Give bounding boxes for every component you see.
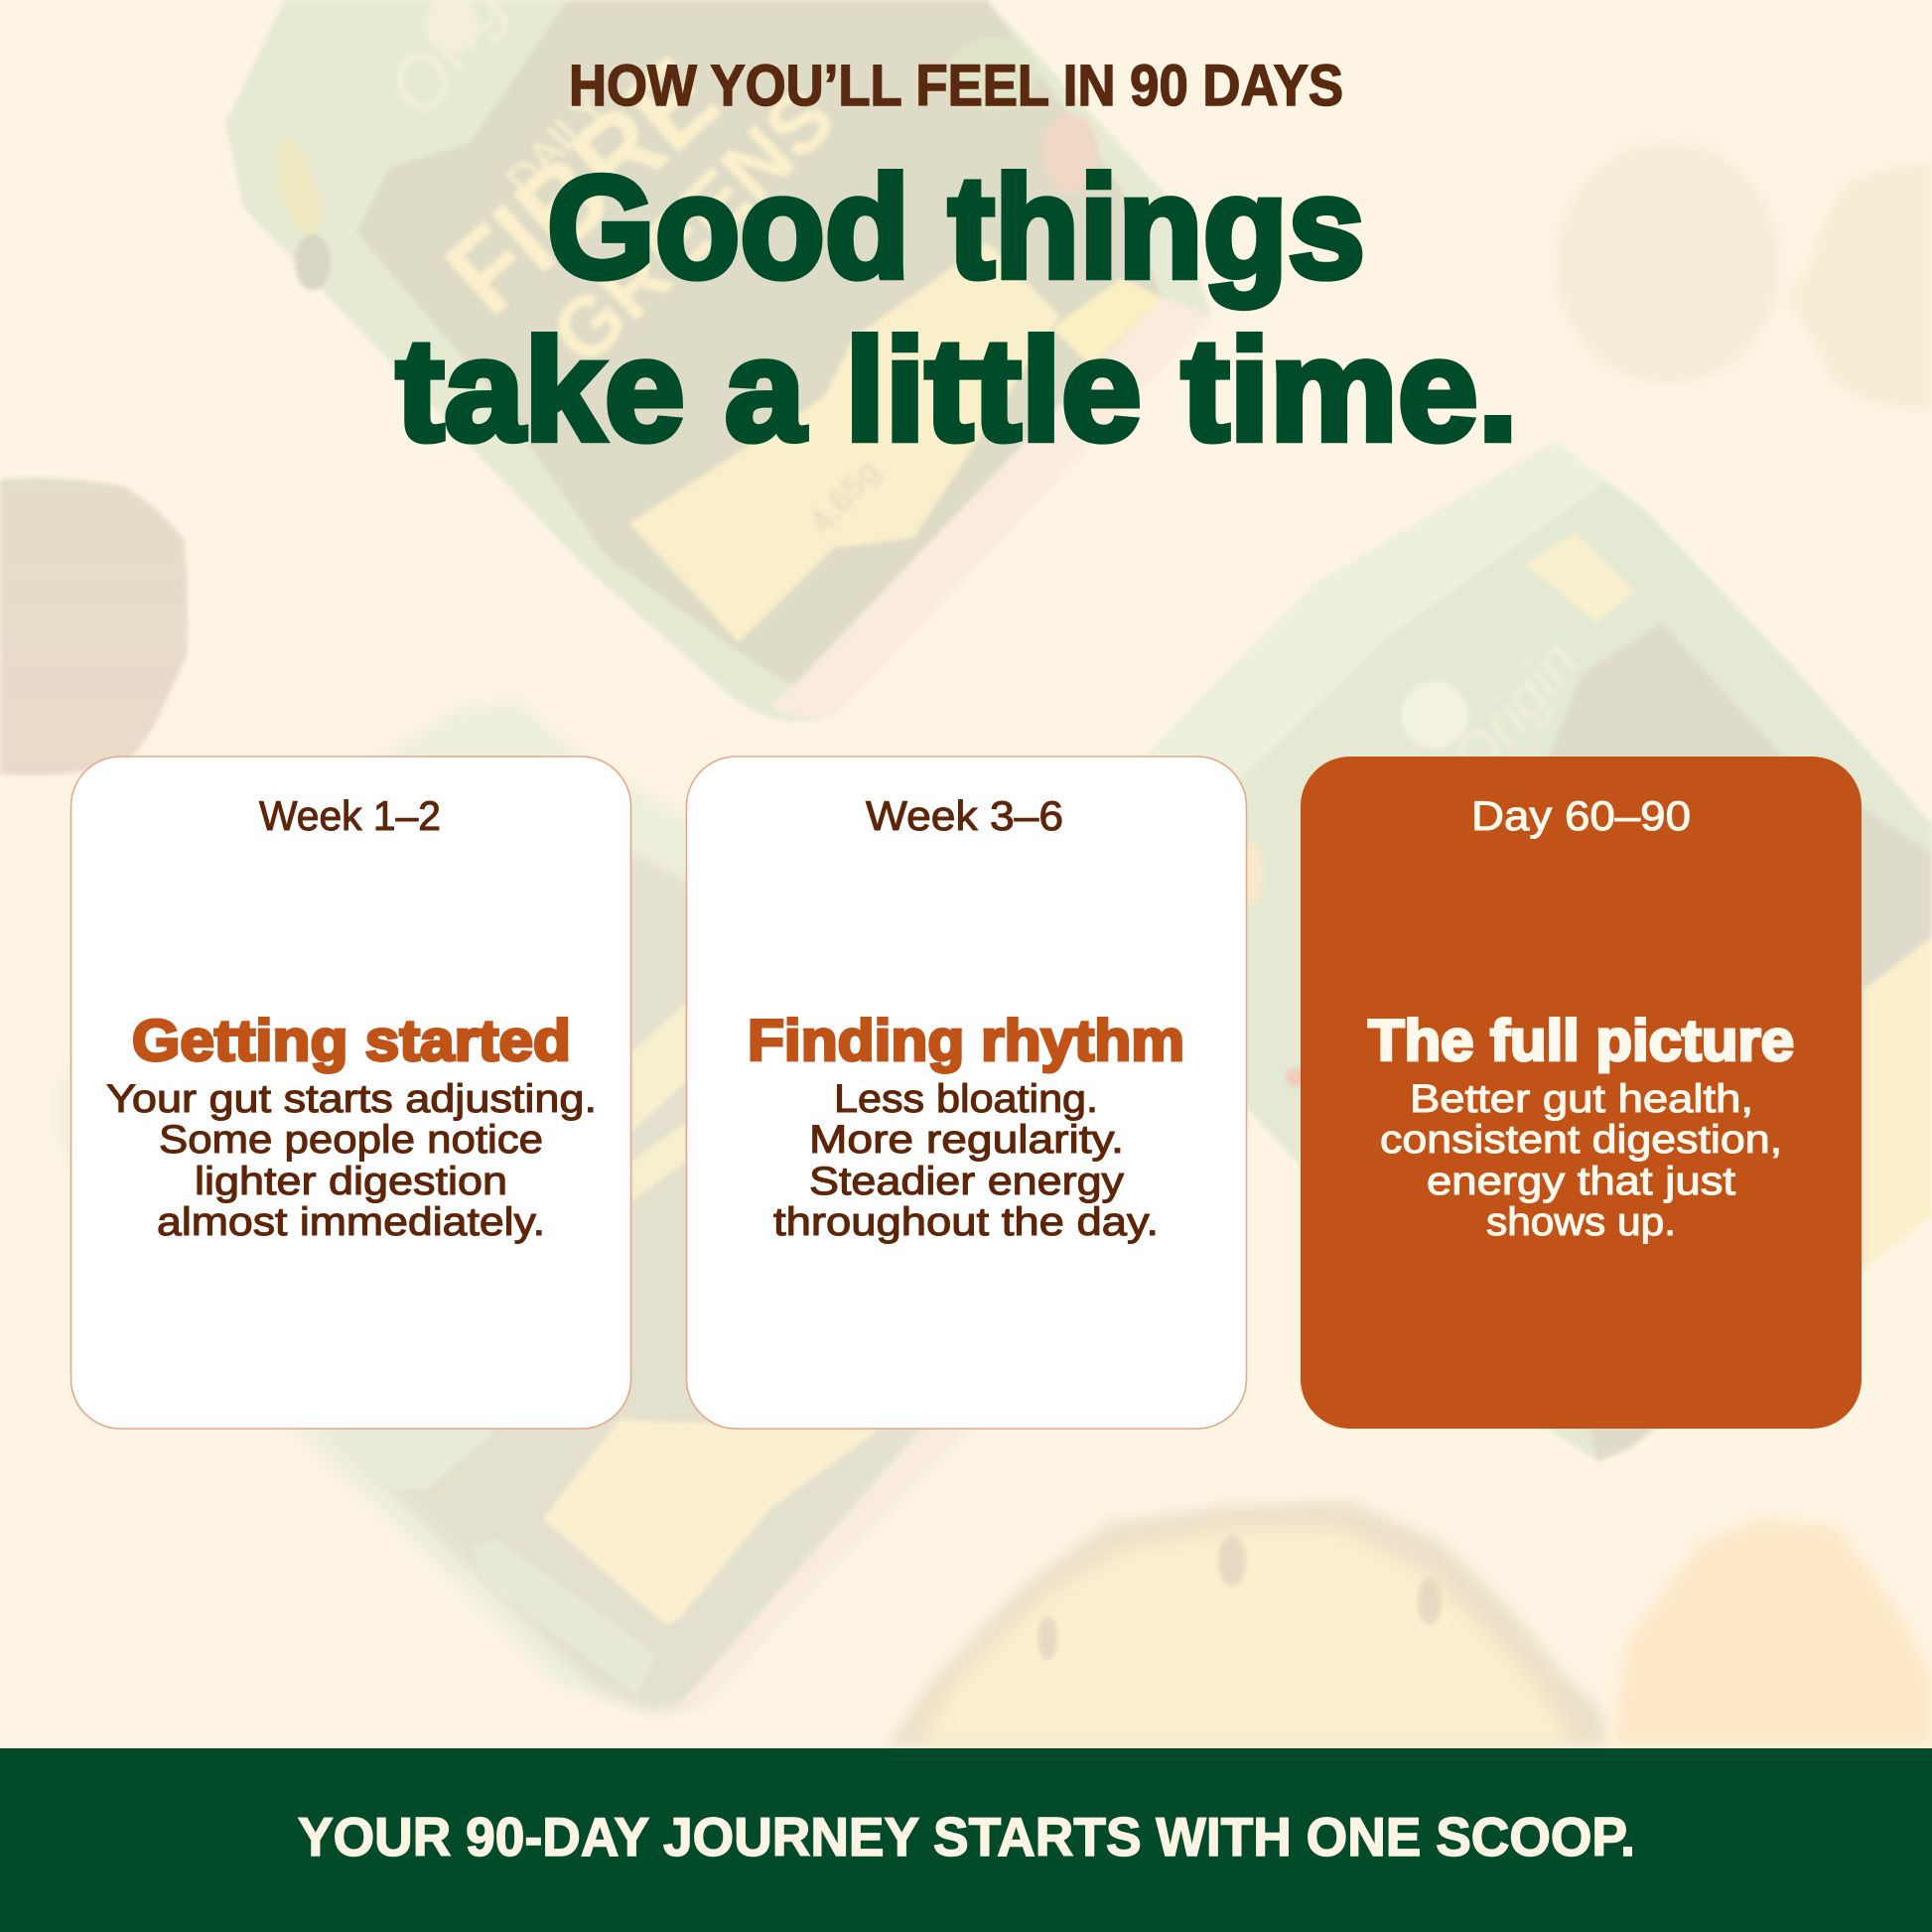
main headline: take a little time.	[396, 309, 1518, 471]
panel: week 3-6: Week 3–6	[866, 792, 1063, 839]
background: faded orange	[1613, 1518, 1932, 1746]
panel: week 3-6: Finding rhythm	[748, 1009, 1184, 1073]
background: faded jar lower left	[60, 701, 1092, 1711]
panel: week 3-6	[687, 757, 1247, 1429]
panel: week 3-6: Steadier energy	[809, 1160, 1124, 1203]
panel: week 1-2: Some people notice	[159, 1118, 543, 1162]
panel: day 60-90: Day 60–90	[1471, 792, 1691, 839]
panel: day 60-90: consistent digestion,	[1380, 1118, 1782, 1162]
panel: week 3-6: Less bloating.	[834, 1077, 1098, 1121]
main headline	[396, 146, 1518, 471]
panel: day 60-90: The full picture	[1368, 1009, 1794, 1073]
panel: day 60-90	[1301, 757, 1862, 1429]
main headline: Good things	[547, 146, 1365, 308]
panel: week 1-2: almost immediately.	[157, 1200, 545, 1244]
panel: week 1-2: Your gut starts adjusting.	[106, 1077, 597, 1121]
background: faded jar top centre: 4.65g	[802, 452, 888, 541]
background: faded pineapple	[887, 1501, 1607, 1746]
panel: week 3-6: throughout the day.	[773, 1200, 1159, 1244]
background: faded guava fruits	[1555, 142, 1932, 409]
background: faded jar right	[1142, 441, 1932, 1461]
background: faded red fruit	[0, 479, 188, 775]
bottom banner	[0, 1748, 1932, 1932]
panel: week 3-6: More regularity.	[809, 1118, 1124, 1162]
panel: day 60-90: Better gut health,	[1410, 1077, 1753, 1121]
eyebrow heading: HOW YOU’LL FEEL IN 90 DAYS	[569, 54, 1343, 118]
panel: week 1-2: Getting started	[132, 1009, 571, 1073]
background: faded jar top centre: DAILY	[497, 81, 616, 206]
background: faded jar top centre	[225, 0, 1212, 722]
background: faded jar right: Origin	[1439, 628, 1591, 792]
panel: week 1-2: lighter digestion	[195, 1160, 507, 1203]
background: faded jar top centre: GREENS	[533, 70, 853, 383]
panel: week 1-2	[71, 757, 631, 1429]
panel: week 1-2: Week 1–2	[259, 792, 441, 839]
panel: day 60-90: energy that just	[1427, 1160, 1735, 1203]
background: faded jar top centre: FIBRE	[423, 34, 742, 339]
bottom banner: YOUR 90-DAY JOURNEY STARTS WITH ONE SCOOP.	[298, 1806, 1635, 1867]
panel: day 60-90: shows up.	[1486, 1200, 1676, 1244]
